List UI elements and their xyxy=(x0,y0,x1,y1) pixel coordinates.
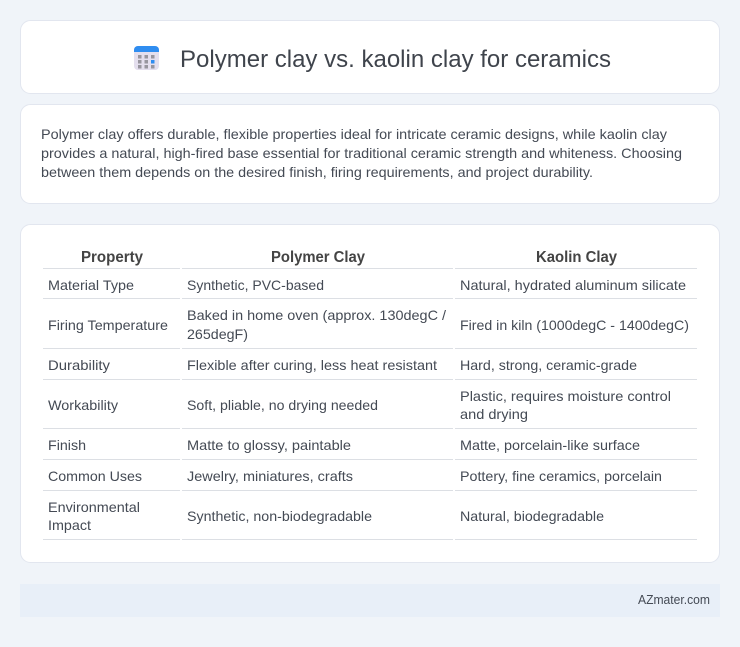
row: material type xyxy=(48,277,686,293)
row: finish xyxy=(48,437,640,453)
icon: calendar xyxy=(134,46,159,70)
row: firing temperature: Firing Temperature xyxy=(48,317,168,333)
row: finish: Matte, porcelain-like surface xyxy=(460,437,640,453)
header panel xyxy=(20,20,720,94)
table header row: Kaolin Clay xyxy=(536,249,617,266)
intro panel xyxy=(20,104,720,204)
row: firing temperature xyxy=(48,307,689,342)
footer bar xyxy=(20,584,720,617)
row: common uses: Common Uses xyxy=(48,468,142,484)
row: environmental impact: Synthetic, non-biodegradable xyxy=(187,508,372,524)
row: finish: Finish xyxy=(48,437,86,453)
row: durability: Durability xyxy=(48,357,110,373)
row: firing temperature: 265degF) xyxy=(187,326,248,342)
row: material type: Material Type xyxy=(48,277,134,293)
intro paragraph: between them depends on the desired finish, firing requirements, and project durability. xyxy=(41,164,593,180)
row: environmental impact: Environmental xyxy=(48,499,140,515)
intro paragraph xyxy=(41,126,682,180)
row: material type: Synthetic, PVC-based xyxy=(187,277,324,293)
row: workability: Plastic, requires moisture control xyxy=(460,388,671,404)
intro paragraph: Polymer clay offers durable, flexible properties ideal for intricate ceramic designs, while kaolin clay xyxy=(41,126,667,142)
row: environmental impact xyxy=(48,499,604,533)
row: common uses: Jewelry, miniatures, crafts xyxy=(187,468,353,484)
row: workability: Workability xyxy=(48,397,118,413)
row: environmental impact: Impact xyxy=(48,517,91,533)
row: common uses xyxy=(48,468,662,484)
row: common uses: Pottery, fine ceramics, porcelain xyxy=(460,468,662,484)
panel: comparison table xyxy=(20,224,720,562)
row: durability: Hard, strong, ceramic-grade xyxy=(460,357,637,373)
row: finish: Matte to glossy, paintable xyxy=(187,437,351,453)
row: durability: Flexible after curing, less heat resistant xyxy=(187,357,437,373)
table header row xyxy=(81,249,617,266)
row: durability xyxy=(48,357,637,373)
table header row: Polymer Clay xyxy=(271,249,365,266)
row: workability: Soft, pliable, no drying needed xyxy=(187,397,378,413)
row: workability xyxy=(48,388,671,422)
row: workability: and drying xyxy=(460,406,528,422)
footer credit: AZmater.com xyxy=(638,593,710,607)
row: environmental impact: Natural, biodegradable xyxy=(460,508,604,524)
row: material type: Natural, hydrated aluminum silicate xyxy=(460,277,686,293)
row: firing temperature: Baked in home oven (approx. 130degC / xyxy=(187,307,446,323)
title: Polymer clay vs. kaolin clay for ceramics xyxy=(180,46,611,73)
table header row: Property xyxy=(81,249,143,266)
row: firing temperature: Fired in kiln (1000degC - 1400degC) xyxy=(460,317,689,333)
intro paragraph: provides a natural, high-fired base essential for traditional ceramic strength and whiteness. Choosing xyxy=(41,145,682,161)
